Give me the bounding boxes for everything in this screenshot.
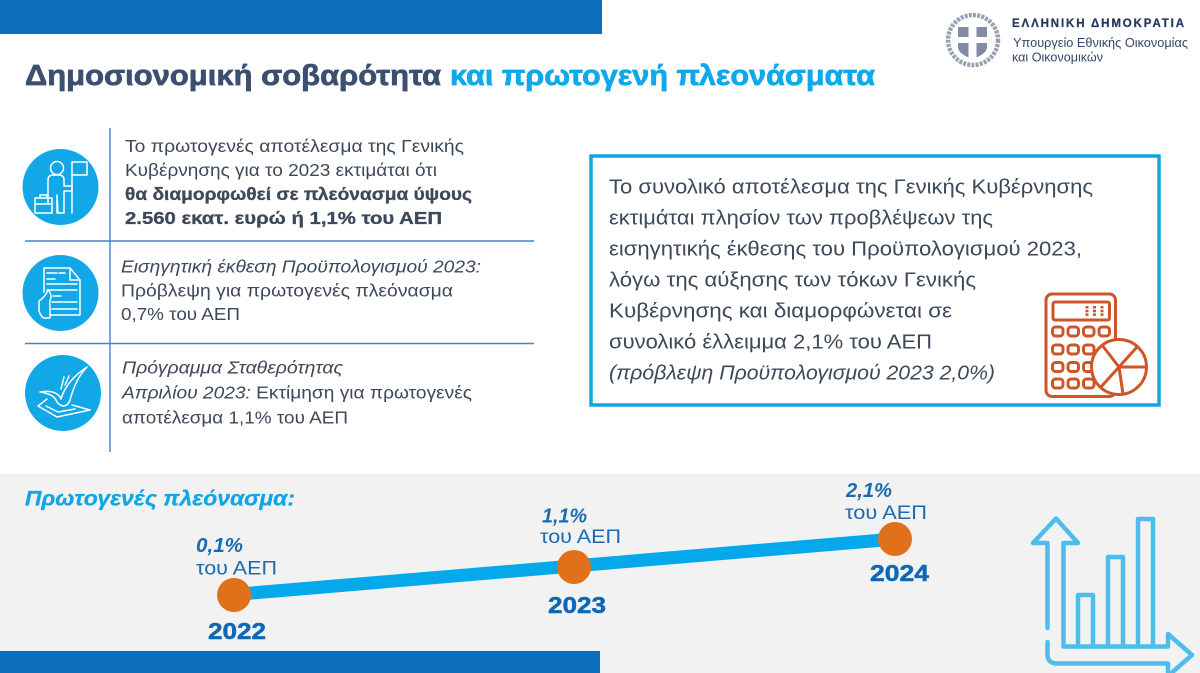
title (25, 60, 875, 92)
point 2023: 1,1% (542, 506, 587, 528)
text block: primary result 2023 (125, 136, 472, 228)
text block: primary result 2023: Κυβέρνησης για το 2023 εκτιμάται ότι (125, 160, 437, 180)
dividers (25, 128, 534, 452)
text block: overall balance: εισηγητικής έκθεσης του Προϋπολογισμού 2023, (609, 238, 1082, 260)
text block: overall balance: Κυβέρνησης και διαμορφώνεται σε (609, 300, 952, 322)
point 2024 (845, 480, 929, 586)
text block: stability programme: Απριλίου 2023: Εκτίμηση για πρωτογενές (121, 382, 472, 402)
logo emblem (948, 15, 998, 65)
bottom blue bar (0, 651, 600, 673)
line chart: surplus 2022 to 2024 (196, 480, 929, 644)
left panel: fiscal points (22, 128, 534, 452)
title: Δημοσιονομική σοβαρότητα (25, 60, 441, 92)
point 2024: του ΑΕΠ (845, 502, 927, 524)
text block: budget report: Εισηγητική έκθεση Προϋπολογισμού 2023: (121, 256, 481, 276)
text block: stability programme: αποτέλεσμα 1,1% του ΑΕΠ (122, 408, 348, 428)
text block: overall balance: εκτιμάται πλησίον των προβλέψεων της (609, 208, 993, 230)
text block: primary result 2023: θα διαμορφωθεί σε πλεόνασμα ύψους (125, 184, 472, 204)
point 2022: 0,1% (196, 535, 243, 557)
panel: general government balance (591, 156, 1159, 405)
point 2024: 2,1% (845, 480, 892, 502)
text block: budget report: Πρόβλεψη για πρωτογενές πλεόνασμα (121, 280, 453, 300)
icon: person with flag (22, 149, 98, 225)
point 2022: 2022 (208, 618, 266, 644)
text block: overall balance: (πρόβλεψη Προϋπολογισμού 2023 2,0%) (609, 362, 995, 384)
text block: budget report: 0,7% του ΑΕΠ (121, 304, 240, 324)
logo text: και Οικονομικών (1012, 50, 1103, 64)
text block: overall balance: συνολικό έλλειμμα 2,1% του ΑΕΠ (609, 332, 932, 354)
panel: primary surplus timeline (0, 474, 1200, 673)
logo text: ΕΛΛΗΝΙΚΗ ΔΗΜΟΚΡΑΤΙΑ (1012, 18, 1184, 30)
icon: growth bar chart with arrows (1033, 518, 1192, 673)
top blue bar (0, 0, 602, 34)
point 2022 (196, 535, 277, 644)
icon: calculator and pie chart (1046, 294, 1146, 396)
logo text (1012, 18, 1188, 64)
text block: overall balance: Το συνολικό αποτέλεσμα της Γενικής Κυβέρνησης (609, 176, 1093, 198)
point 2023: του ΑΕΠ (540, 526, 621, 548)
logo text: Υπουργείο Εθνικής Οικονομίας (1013, 35, 1188, 50)
title: και πρωτογενή πλεονάσματα (450, 60, 875, 92)
point 2023: 2023 (548, 592, 606, 618)
logo: Hellenic Republic ministry (948, 15, 1188, 65)
text block: budget report (121, 256, 481, 324)
text block: overall balance (609, 176, 1093, 384)
point 2023 (540, 506, 621, 618)
point 2022: του ΑΕΠ (196, 558, 277, 580)
point 2024: 2024 (870, 560, 929, 586)
text block: primary result 2023: 2.560 εκατ. ευρώ ή 1,1% του ΑΕΠ (125, 208, 442, 228)
text block: stability programme: Πρόγραμμα Σταθερότητας (122, 358, 344, 378)
timeline heading: Πρωτογενές πλεόνασμα: (25, 488, 295, 510)
text block: primary result 2023: Το πρωτογενές αποτέλεσμα της Γενικής (125, 136, 464, 156)
text block: overall balance: λόγω της αύξησης των τόκων Γενικής (609, 270, 976, 292)
icon: document in hand (22, 255, 98, 331)
icon: check mark on ballot (25, 355, 101, 431)
text block: stability programme (121, 358, 472, 428)
